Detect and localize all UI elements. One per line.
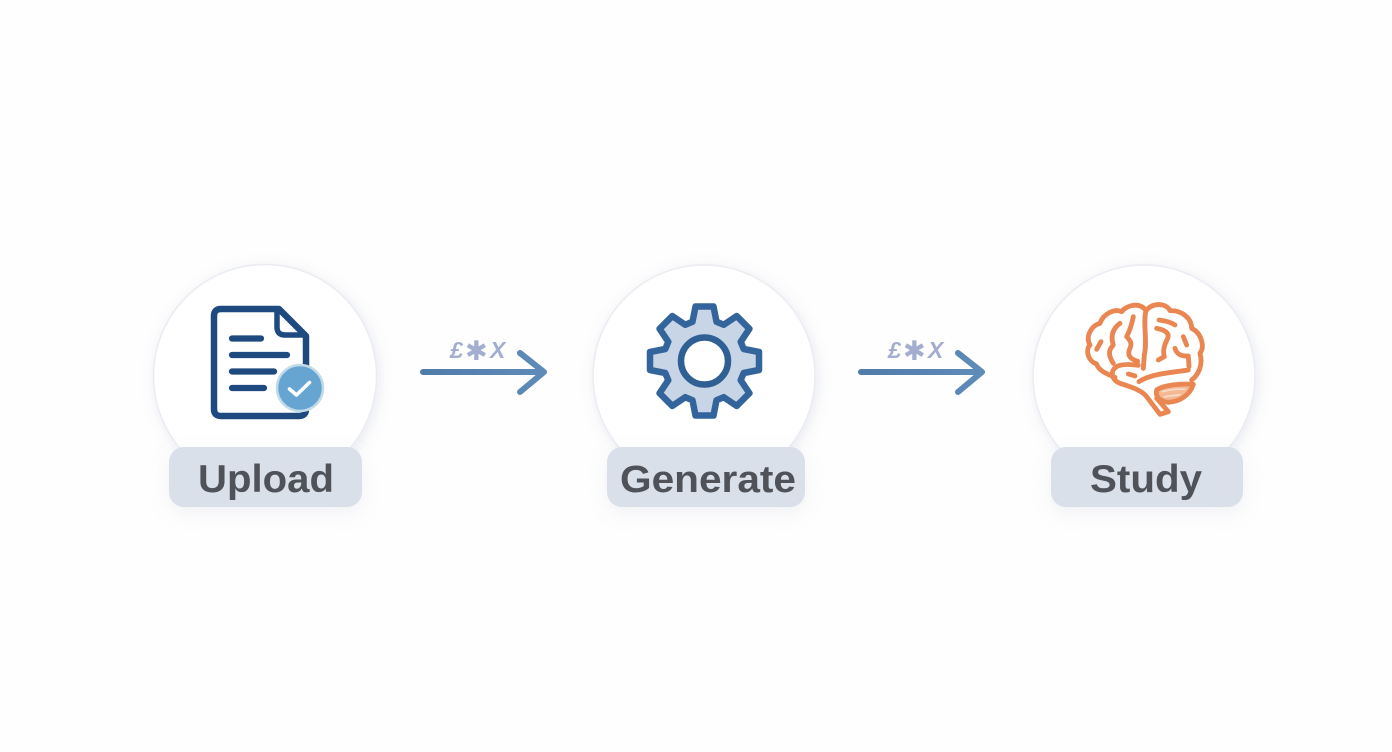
arrow symbols: £: [449, 337, 464, 363]
arrow symbols: £: [887, 337, 902, 363]
label pill: Generate: [607, 447, 805, 507]
arrow shape: [861, 353, 982, 392]
arrow symbols: [449, 336, 507, 367]
step: generate: [593, 265, 815, 507]
arrow: upload to generate: [423, 336, 544, 392]
arrow symbols: [887, 336, 945, 367]
label text: Generate: Generate: [620, 459, 796, 501]
arrow symbols: X: [926, 337, 945, 363]
label pill: Study: [1051, 447, 1243, 507]
icon: gear: [650, 306, 759, 416]
arrow: generate to study: [861, 336, 982, 392]
step: study: [1033, 265, 1255, 507]
circle: study: [1033, 265, 1255, 487]
icon: brain: [1088, 305, 1202, 414]
arrow shape: [423, 353, 544, 392]
circle: upload: [154, 264, 376, 488]
label pill: Upload: [169, 447, 362, 507]
arrow symbols: ✱: [465, 336, 488, 367]
label text: Study: Study: [1090, 458, 1202, 501]
circle: generate: [593, 265, 815, 487]
arrow symbols: X: [488, 337, 507, 363]
label text: Upload: Upload: [198, 458, 334, 501]
arrow symbols: ✱: [903, 336, 926, 367]
step: upload: [154, 264, 376, 507]
icon: document with check badge: [214, 308, 323, 416]
